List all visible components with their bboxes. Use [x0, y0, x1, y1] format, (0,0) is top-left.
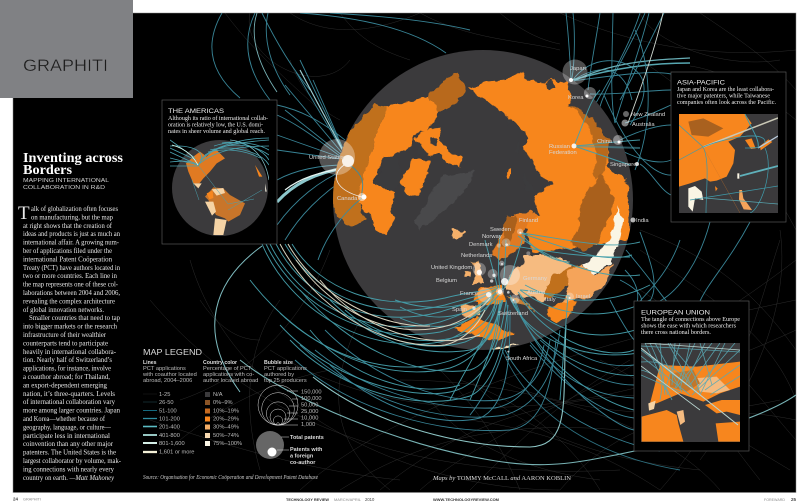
legend: lines: 201-400 [159, 424, 180, 430]
legend: bubble size: 1,000 [301, 422, 315, 428]
article body text: on manufacturing, but the map [31, 212, 113, 221]
country labels: Denmark [469, 242, 493, 248]
article body text: country on earth. —Matt Mahoney [23, 473, 115, 482]
legend: bubble size: 150,000 [301, 390, 322, 396]
European Union text: shows the ease with which researchers [641, 324, 737, 330]
legend: bubble size: 50,000 [301, 402, 318, 408]
legend title: MAP LEGEND [143, 348, 202, 357]
legend: bubble size: 100,000 [301, 396, 322, 402]
article heading [23, 151, 124, 191]
European Union text [641, 316, 740, 336]
legend: lines: Lines [143, 360, 157, 366]
European Union title: EUROPEAN UNION [641, 310, 710, 316]
main globe [331, 50, 633, 351]
flow lines behind globe [150, 13, 796, 490]
footer center: MARCH/APRIL [334, 498, 361, 502]
legend: lines [142, 360, 197, 456]
country labels: Australia [632, 122, 655, 128]
footer center [286, 497, 499, 502]
article body text: largest collaborator by volume, mak- [23, 456, 121, 465]
Americas text: oration is relatively low, the U.S. domi- [168, 122, 263, 128]
country labels: Sweden [490, 227, 511, 233]
article body text: alk of globalization often focuses [31, 204, 118, 213]
grey section tab [0, 0, 133, 98]
legend: lines: 1,601 or more [159, 450, 194, 456]
footer center: WWW.TECHNOLOGYREVIEW.COM [433, 498, 499, 502]
Americas globe [170, 138, 269, 236]
country labels: Switzerland [498, 311, 528, 317]
legend: bubble size [256, 360, 324, 466]
legend: lines: 1-25 [159, 392, 170, 398]
article heading: Inventing across [23, 151, 124, 166]
article body text: revealing the complex architecture [23, 296, 116, 305]
article body text: and Korea—whether because of [23, 414, 105, 423]
country bubbles [319, 60, 639, 353]
country labels: Spain [452, 307, 467, 313]
article body text: at right shows that the creation of [23, 221, 112, 230]
country labels: China [597, 139, 613, 145]
country labels: Germany [523, 276, 547, 282]
country labels: Japan [570, 66, 586, 72]
footer center: 2010 [365, 497, 375, 502]
legend: total vs foreign co-author bubble: a foreign [290, 454, 314, 460]
article body text: the map represents one of these col- [23, 280, 118, 289]
article body text: Treaty (PCT) have authors located in [23, 263, 120, 272]
article body text: ing connections with nearly every [23, 464, 114, 473]
article body text: ber of applications filed under the [23, 246, 113, 255]
country labels: India [636, 218, 649, 224]
country labels: Finland [519, 218, 538, 224]
article body text: of international collaboration vary [23, 397, 115, 406]
article body text: into bigger markets or the research [23, 322, 117, 331]
article body text: ideas and products is just as much an [23, 229, 120, 238]
country labels: Israel [576, 294, 590, 300]
legend: bubble size: authored by [264, 372, 294, 378]
article body text: a coauthor abroad; for Thailand, [23, 372, 110, 381]
article body text: international Patent Coöperation [23, 254, 112, 263]
footer right: FOREWARD [764, 498, 785, 502]
legend: total vs foreign co-author bubble: Patents with [290, 447, 323, 453]
country labels: Russian [549, 144, 570, 150]
legend: country color: 10%–19% [213, 408, 239, 414]
legend: country color: Percentage of PCT [203, 366, 252, 372]
footer left: GRAPHITI [23, 498, 41, 502]
country labels: France [460, 291, 478, 297]
Americas text: nates in sheer volume and global reach. [168, 129, 265, 135]
country labels: Belgium [436, 278, 457, 284]
article body text: tion. Nearly half of Switzerland’s [23, 355, 112, 364]
article body text: an export-dependent emerging [23, 380, 107, 389]
legend: country color: 20%–29% [213, 416, 239, 422]
article body text: T [18, 203, 30, 224]
footer left [13, 496, 41, 502]
country labels: Austria [527, 290, 546, 296]
land: Europe, Middle East, Africa [450, 200, 623, 351]
Asia-Pacific title: ASIA-PACIFIC [677, 80, 726, 86]
legend: lines: 401-800 [159, 433, 180, 439]
country labels: United States [309, 155, 344, 161]
legend: lines: 51-100 [159, 408, 177, 414]
country labels: Italy [545, 297, 556, 303]
article body text: coinvention than any other major [23, 439, 113, 448]
Asia-Pacific text: tive major patenters, while Taiwanese [677, 94, 770, 100]
legend: bubble size: 25,000 [301, 409, 318, 415]
bubble: United States [319, 139, 355, 175]
article heading: Borders [23, 163, 73, 178]
section title: GRAPHITI [23, 57, 108, 75]
legend: bubble size: PCT applications [264, 366, 307, 372]
country labels: Singapore [610, 162, 636, 168]
Asia-Pacific text: Japan and Korea are the least collabora- [677, 87, 774, 93]
article body text: of global innovation networks. [23, 305, 104, 314]
legend: total vs foreign co-author bubble [256, 431, 324, 466]
source note: Source: Organisation for Economic Coöperation and Development Patent Database [143, 474, 318, 481]
European Union map [641, 343, 740, 442]
legend: lines: 101-200 [159, 416, 180, 422]
land: Russia and Asia [470, 72, 630, 253]
European Union text: there cross national borders. [641, 330, 712, 336]
panel: Asia-Pacific [671, 72, 786, 222]
article body text [18, 203, 121, 482]
article body text: more among larger countries. Japan [23, 406, 120, 415]
article body text: nation, it’s three-quarters. Levels [23, 389, 115, 398]
article body text: Smaller countries that need to tap [29, 313, 120, 322]
article body text: two or more countries. Each line in [23, 271, 117, 280]
legend: country color: 75%–100% [213, 441, 242, 447]
article body text: infrastructure of their wealthier [23, 330, 106, 339]
European Union text: The tangle of connections above Europe [641, 316, 740, 323]
legend: bubble size: 10,000 [301, 416, 318, 422]
footer center: TECHNOLOGY REVIEW [286, 498, 329, 502]
land: North America and Arctic [331, 72, 630, 253]
footer left: 24 [13, 496, 19, 502]
legend: lines: 801-1,600 [159, 441, 185, 447]
country labels: South Africa [506, 356, 538, 362]
Americas title: THE AMERICAS [168, 108, 224, 115]
article body text: participate less in international [23, 431, 110, 440]
country labels: Norway [482, 234, 502, 240]
legend: total vs foreign co-author bubble: Total patents [290, 435, 324, 441]
legend: lines: PCT applications [143, 366, 186, 372]
country labels: Canada [337, 196, 358, 202]
article body text: counterparts tend to participate [23, 338, 109, 347]
panel: the Americas [162, 100, 277, 244]
map credit: Maps by TOMMY McCALL and AARON KOBLIN [432, 476, 572, 482]
legend: country color: 30%–49% [213, 424, 239, 430]
map legend [142, 348, 324, 466]
country labels: Federation [549, 150, 577, 156]
legend: country color [203, 360, 258, 447]
Asia-Pacific text: companies often look across the Pacific. [677, 99, 777, 106]
legend: country color: 0%–9% [213, 400, 233, 406]
panel: European Union [634, 301, 749, 451]
footer right [764, 497, 797, 502]
article body text: geography, language, or culture— [23, 422, 111, 431]
legend: country color: N/A [213, 392, 223, 398]
legend: lines: with coauthor located [142, 372, 197, 378]
footer right: 25 [791, 497, 797, 502]
article heading: MAPPING INTERNATIONAL [23, 178, 109, 184]
bubble: Japan [562, 60, 588, 84]
Americas text: Although its ratio of international collab- [168, 115, 268, 122]
legend: country color: author located abroad [203, 378, 258, 384]
legend: bubble size: top 25 producers [264, 378, 307, 384]
legend: country color: 50%–74% [213, 433, 239, 439]
country labels [309, 66, 665, 362]
Asia-Pacific map [679, 114, 778, 213]
country labels: Netherlands [461, 253, 492, 259]
legend: total vs foreign co-author bubble: co-author [290, 460, 316, 466]
Americas text [168, 115, 268, 135]
country labels: New Zealand [631, 112, 665, 118]
article heading: COLLABORATION IN R&D [23, 185, 105, 191]
legend: lines: abroad, 2004–2006 [143, 378, 192, 384]
article body text: patenters. The United States is the [23, 448, 117, 457]
legend: country color: Country color [203, 360, 237, 366]
article body text: laborations between 2004 and 2006, [23, 288, 120, 297]
legend: lines: 26-50 [159, 400, 174, 406]
flow lines over globe [250, 90, 650, 430]
article body text: heavily in international collabora- [23, 347, 116, 356]
country labels: United Kingdom [431, 265, 472, 271]
country labels: Korea [568, 95, 584, 101]
legend: country color: applications with co- [203, 372, 254, 378]
Asia-Pacific text [677, 87, 777, 106]
legend: bubble size: Bubble size [264, 360, 293, 366]
article body text: international affair. A growing num- [23, 238, 119, 247]
article body text: applications, for instance, involve [23, 364, 112, 373]
